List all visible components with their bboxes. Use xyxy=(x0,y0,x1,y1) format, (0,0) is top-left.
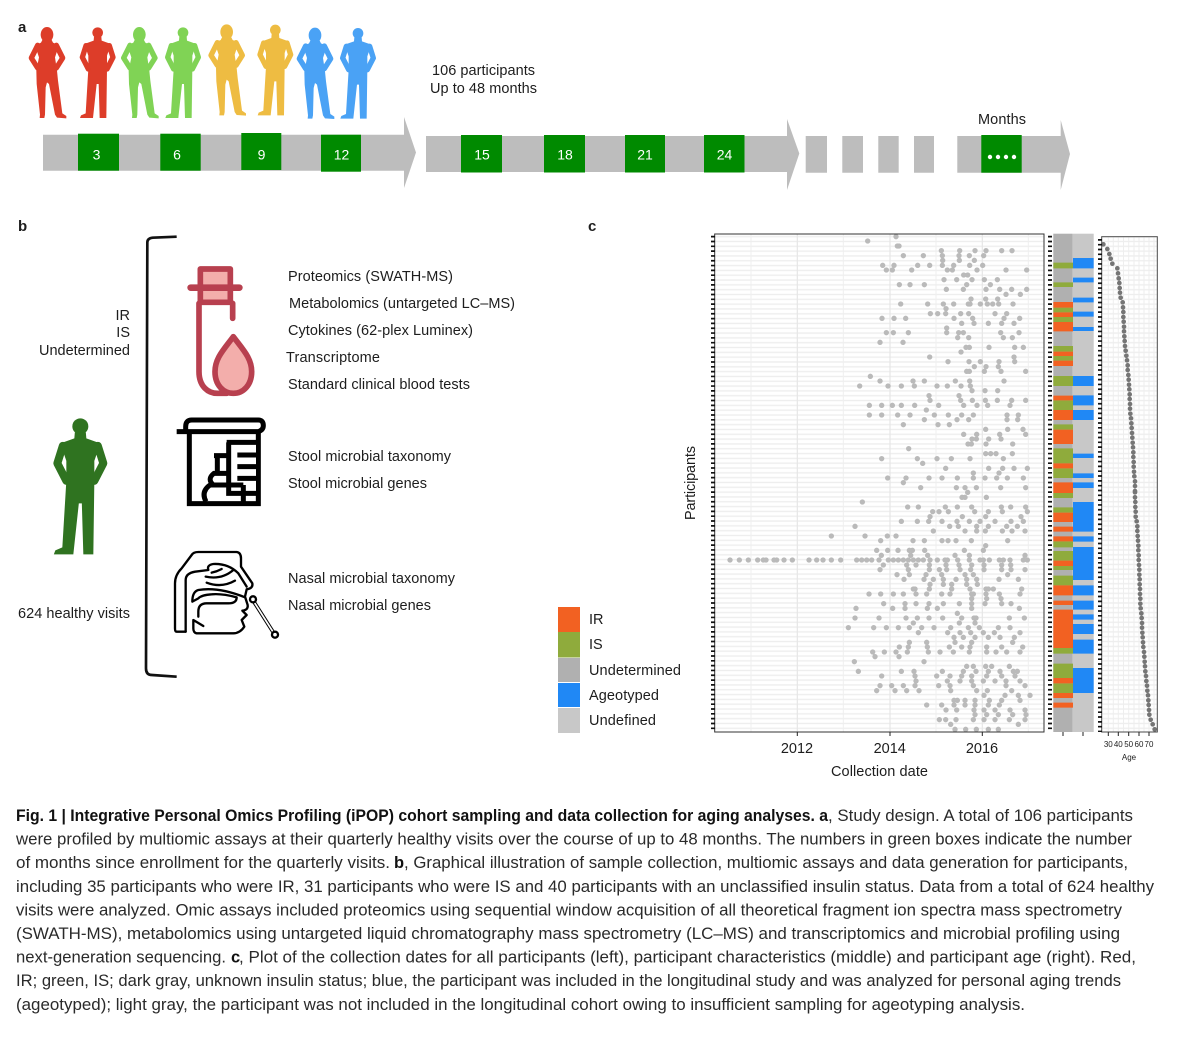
timeline note: 106 participants xyxy=(432,63,535,79)
age axis labels: 30 xyxy=(1104,740,1113,749)
timeline note: Up to 48 months xyxy=(430,81,537,97)
insulin status labels xyxy=(39,308,130,359)
icon: green person xyxy=(54,418,103,554)
age axis labels: 70 xyxy=(1145,740,1154,749)
caption: , Study design. A total of 106 participants xyxy=(828,807,1133,825)
arrow 1: 3 xyxy=(93,146,101,162)
icon: blood tube and drop xyxy=(191,269,252,393)
caption: were profiled by multiomic assays at their quarterly healthy visits over the course of up to 48 months. The numbers in green boxes indicate the number xyxy=(15,831,1133,849)
assay list: nasal: Nasal microbial taxonomy xyxy=(288,571,456,587)
timeline note xyxy=(430,63,537,97)
track: insulin status xyxy=(1053,263,1073,498)
panel b: sample collection xyxy=(18,218,515,677)
insulin status labels: Undetermined xyxy=(39,343,130,359)
participant silhouettes xyxy=(31,24,373,119)
x axis labels: 2014 xyxy=(874,741,906,757)
participant characteristics tracks xyxy=(1050,234,1094,736)
caption: of months since enrollment for the quarterly visits. xyxy=(16,854,390,872)
legend: IR xyxy=(589,612,604,628)
arrow 3 xyxy=(806,112,1070,190)
arrow 2: 21 xyxy=(637,146,653,162)
assay list: nasal: Nasal microbial genes xyxy=(288,598,431,614)
icon: nasal cavity and swab xyxy=(175,552,278,638)
caption: IR; green, IS; dark gray, unknown insulin status; blue, the participant was included in the longitudinal study and was analyzed for personal aging trends xyxy=(16,972,1121,990)
assay list: nasal xyxy=(288,571,456,614)
x axis labels: Collection date xyxy=(831,764,928,780)
icon: stool jar xyxy=(177,420,263,504)
legend: Undefined xyxy=(589,713,656,729)
assay list: stool: Stool microbial taxonomy xyxy=(288,449,452,465)
arrow 2 xyxy=(426,119,799,190)
assay list: blood: Standard clinical blood tests xyxy=(288,377,470,393)
caption: including 35 participants who were IR, 31 participants who were IS and 40 participants with an unclassified insulin status. Data from a total of 624 healthy xyxy=(16,878,1155,896)
assay list: blood: Metabolomics (untargeted LC–MS) xyxy=(289,296,515,312)
caption: b xyxy=(394,854,404,872)
y axis title: Participants xyxy=(683,446,699,520)
caption: Fig. 1 | Integrative Personal Omics Profiling (iPOP) cohort sampling and data collection for aging analyses. a xyxy=(16,807,829,825)
x axis labels xyxy=(781,741,998,780)
assay list: blood: Proteomics (SWATH-MS) xyxy=(288,269,453,285)
assay list: blood: Cytokines (62-plex Luminex) xyxy=(288,323,473,339)
scatter plot of collection dates xyxy=(713,234,1044,736)
assay list: stool: Stool microbial genes xyxy=(288,476,427,492)
arrow 1 xyxy=(43,117,416,188)
age axis labels: Age xyxy=(1122,753,1137,762)
track: ageotyped xyxy=(1073,258,1094,488)
legend: IS xyxy=(589,637,603,653)
arrow 2: 24 xyxy=(717,146,732,162)
x axis labels: 2016 xyxy=(966,741,998,757)
age axis labels: 40 xyxy=(1114,740,1123,749)
arrow 1: 12 xyxy=(334,146,349,162)
arrow 2: 18 xyxy=(557,146,573,162)
caption: visits were analyzed. Omic assays included proteomics using sequential window acquisition of all theoretical fragment ion spectra mass spectrometry xyxy=(16,901,1123,919)
caption: , Plot of the collection dates for all participants (left), participant characteristics (middle) and participant age (right). Red, xyxy=(239,949,1136,967)
caption: , Graphical illustration of sample collection, multiomic assays and data generation for participants, xyxy=(404,854,1128,872)
legend: Ageotyped xyxy=(589,688,659,704)
age plot xyxy=(1100,237,1157,762)
arrow 3: Months xyxy=(978,112,1026,128)
panel a: study design xyxy=(18,19,1070,190)
caption xyxy=(15,807,1155,1014)
caption: (SWATH-MS), metabolomics using untargeted liquid chromatography mass spectrometry (LC–MS) and transcriptomics and microbial profiling using xyxy=(16,925,1120,943)
x axis labels: 2012 xyxy=(781,741,813,757)
arrow 1: 6 xyxy=(173,146,181,162)
legend xyxy=(558,607,681,733)
panel label a: a xyxy=(18,19,27,36)
panel label b: b xyxy=(18,218,27,235)
assay list: stool xyxy=(288,449,452,492)
insulin status labels: IR xyxy=(116,308,130,324)
healthy visits label: 624 healthy visits xyxy=(18,606,130,622)
age axis labels: 60 xyxy=(1135,740,1144,749)
assay list: blood xyxy=(286,269,515,393)
legend: Undetermined xyxy=(589,663,681,679)
insulin status labels: IS xyxy=(116,325,130,341)
caption: c xyxy=(231,949,240,967)
assay list: blood: Transcriptome xyxy=(286,350,380,366)
bracket xyxy=(146,237,177,677)
caption: next-generation sequencing. xyxy=(16,949,226,967)
age axis labels xyxy=(1104,740,1154,762)
panel label c: c xyxy=(588,218,596,235)
age axis labels: 50 xyxy=(1124,740,1134,749)
arrow 1: 9 xyxy=(258,146,266,162)
arrow 2: 15 xyxy=(474,146,490,162)
panel c: collection dates plot xyxy=(558,218,1157,780)
caption: (ageotyped); light gray, the participant was not included in the longitudinal cohort owing to insufficient sampling for ageotyping analysis. xyxy=(16,996,1025,1014)
